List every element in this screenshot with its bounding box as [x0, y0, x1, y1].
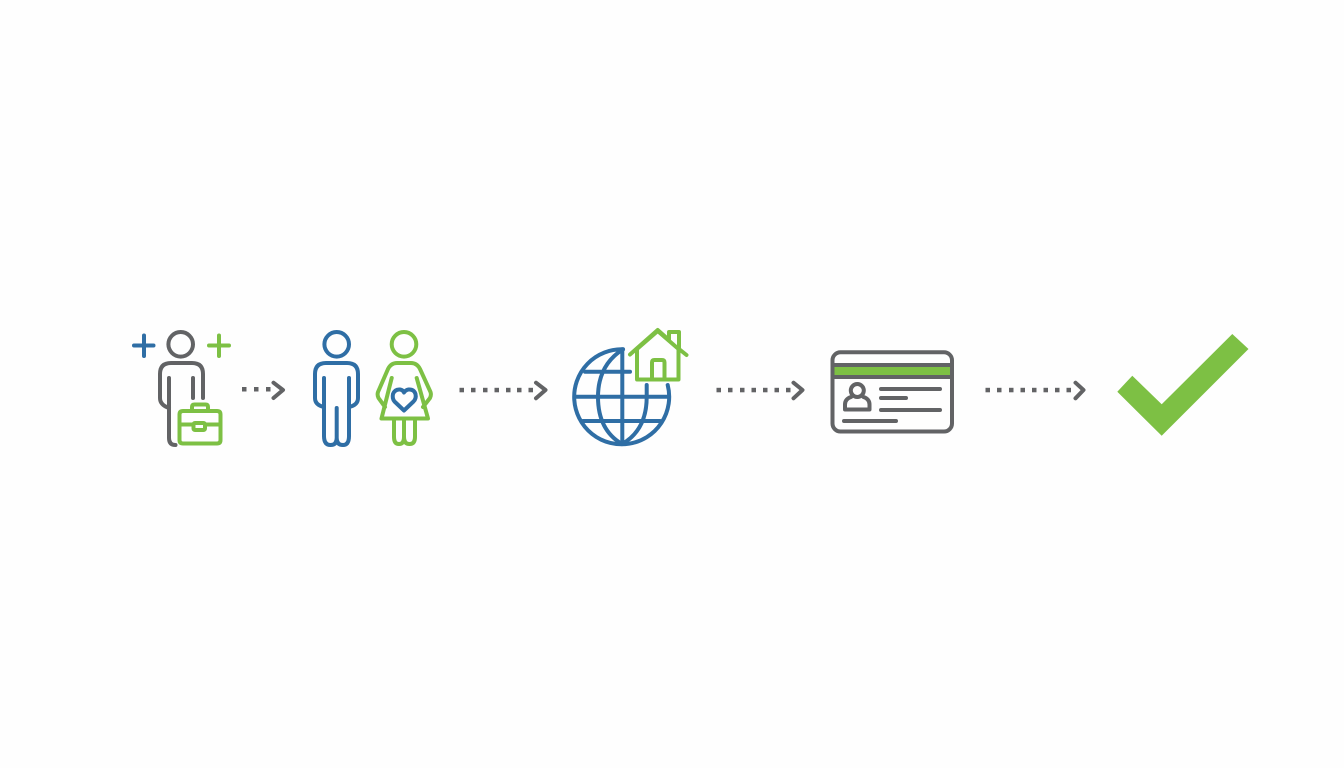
icon: person with briefcase and plus signs	[134, 332, 229, 445]
icon: ID card	[832, 352, 952, 432]
man	[315, 332, 358, 445]
arrow 4	[986, 383, 1084, 398]
green stripe	[833, 367, 951, 376]
arrow 3	[716, 383, 802, 398]
house	[630, 330, 686, 380]
arrow 2	[460, 383, 546, 398]
heart	[393, 389, 416, 410]
pregnant woman	[378, 332, 431, 444]
globe	[574, 349, 669, 444]
portrait	[845, 384, 870, 410]
icon: globe with house	[574, 330, 686, 444]
card text lines	[844, 389, 940, 421]
arrow 1	[242, 383, 283, 398]
icon: man and pregnant woman	[315, 332, 431, 445]
icon: green check mark	[1117, 334, 1248, 436]
